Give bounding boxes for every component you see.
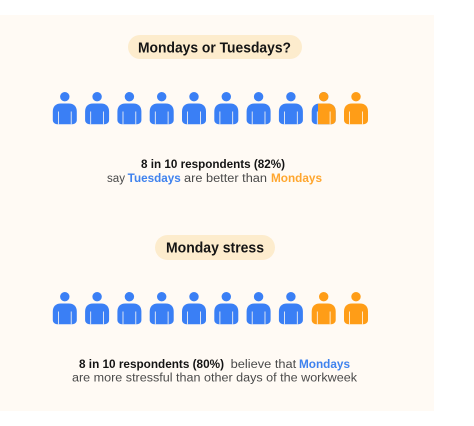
caption: 82 percent bbox=[107, 159, 322, 185]
caption: 82 percent: 8 in 10 respondents (82%) bbox=[141, 159, 285, 171]
caption: 80 percent: believe that bbox=[231, 359, 297, 371]
caption: 82 percent: Tuesdays bbox=[128, 173, 181, 185]
heading pill: Mondays or Tuesdays bbox=[128, 35, 302, 59]
caption: 82 percent: Mondays bbox=[271, 173, 322, 185]
heading pill: Monday stress: Monday stress bbox=[166, 240, 264, 256]
section: Mondays or Tuesdays bbox=[53, 35, 368, 185]
caption: 80 percent: Mondays bbox=[299, 359, 350, 371]
caption: 80 percent bbox=[72, 359, 357, 384]
caption: 80 percent: are more stressful than other days of the workweek bbox=[72, 372, 357, 384]
pictogram row: 8 blue and 2 orange people bbox=[53, 292, 368, 324]
heading pill: Monday stress bbox=[155, 235, 275, 260]
section: Monday stress bbox=[53, 235, 368, 384]
caption: 82 percent: are better than bbox=[184, 173, 267, 185]
caption: 82 percent: say bbox=[107, 173, 125, 185]
pictogram row: 8 blue and 2 orange people bbox=[53, 92, 368, 124]
caption: 80 percent: 8 in 10 respondents (80%) bbox=[79, 359, 224, 371]
heading pill: Mondays or Tuesdays: Mondays or Tuesdays? bbox=[138, 40, 291, 56]
